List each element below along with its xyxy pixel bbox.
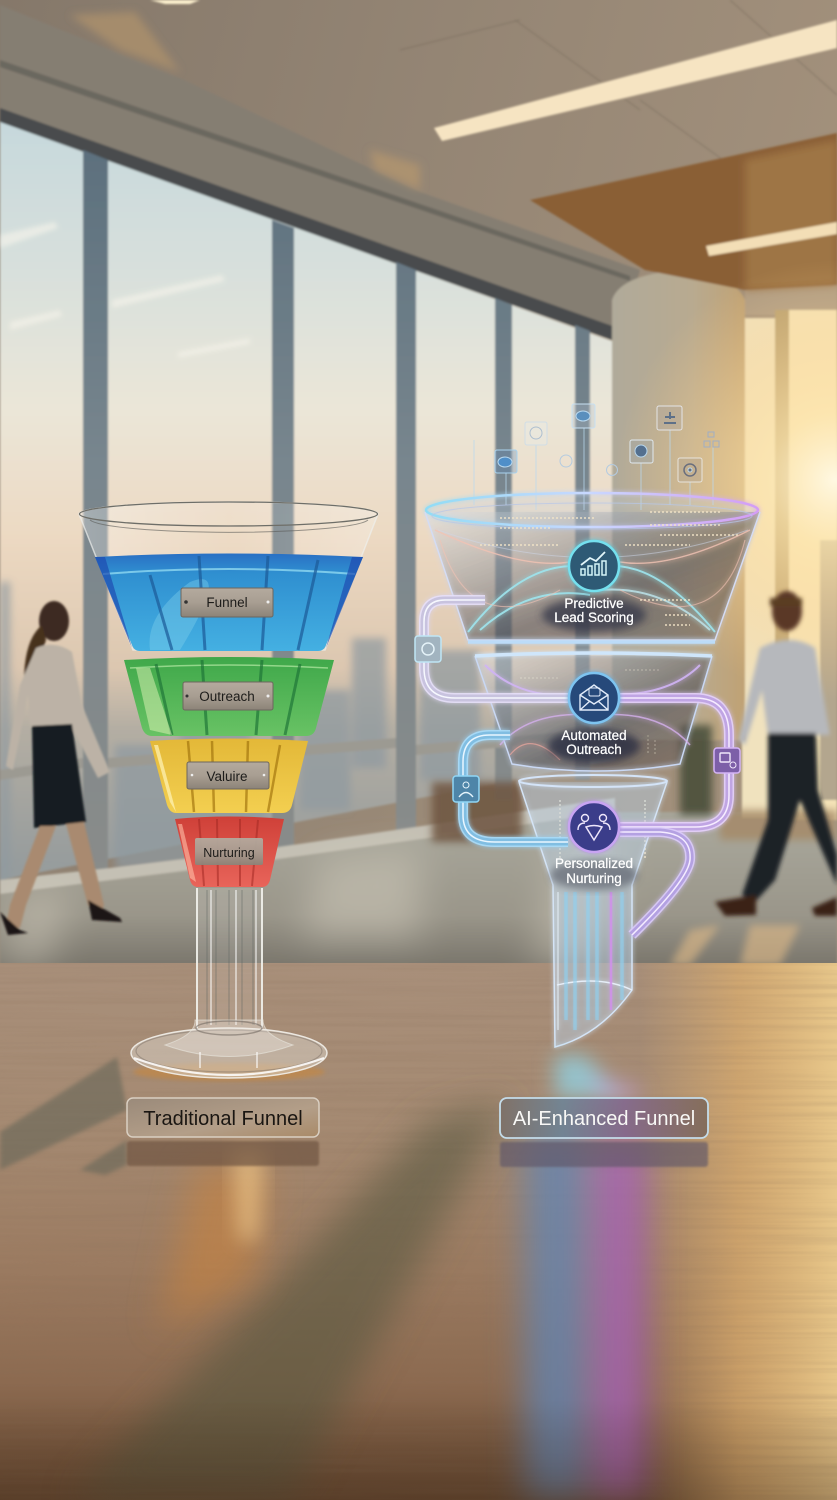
ceiling light strips xyxy=(434,20,837,141)
label plate: Nurturing: Nurturing xyxy=(203,846,255,860)
traditional glass funnel xyxy=(79,502,378,1081)
upper side wall band xyxy=(0,5,640,340)
pipe node: right xyxy=(714,748,740,773)
person: woman walking xyxy=(0,601,122,935)
window mullions xyxy=(83,150,590,880)
caption: Traditional Funnel: Traditional Funnel xyxy=(143,1108,303,1130)
glass stem xyxy=(196,888,263,1030)
pipe: spout return xyxy=(620,832,690,935)
warm wall patches xyxy=(70,12,420,190)
icon: faint refresh xyxy=(560,455,618,476)
label plate: Outreach: Outreach xyxy=(199,689,255,704)
sun glow xyxy=(615,260,837,700)
cloud streaks xyxy=(0,222,250,358)
diagonal shadow band xyxy=(70,1100,510,1500)
distant city skyline xyxy=(0,582,480,882)
window sill xyxy=(0,798,615,894)
label plate: Funnel: Funnel xyxy=(206,595,248,610)
rainbow reflection xyxy=(525,1130,645,1500)
node: Automated Outreach: Outreach xyxy=(566,742,622,757)
icon: org chart xyxy=(704,432,719,447)
node: Personalized Nurturing: Nurturing xyxy=(566,871,622,886)
data scribbles xyxy=(480,512,740,860)
table top xyxy=(0,963,837,1500)
windows xyxy=(0,122,615,882)
funnel tier 2 xyxy=(475,653,712,771)
label plate: Outreach xyxy=(183,682,273,710)
node: Personalized Nurturing: Personalized xyxy=(555,856,633,871)
right windows xyxy=(742,318,775,818)
node: Automated Outreach: Automated xyxy=(561,728,627,743)
right wall above windows xyxy=(745,285,837,315)
funnel tier 3 and spout xyxy=(519,775,667,1047)
node: Predictive Lead Scoring xyxy=(542,541,646,632)
person: man walking xyxy=(715,591,837,916)
data streams and top icons xyxy=(474,404,719,510)
label plate: Valuire xyxy=(187,762,269,789)
lounge furniture xyxy=(432,725,837,842)
icon box: circle check xyxy=(525,422,547,445)
icon box: cloud xyxy=(572,404,595,428)
caption: AI-Enhanced Funnel: AI-Enhanced Funnel xyxy=(513,1108,695,1130)
AI holographic funnel xyxy=(415,404,760,1100)
hologram table glow xyxy=(555,1055,640,1100)
bottom dark band xyxy=(0,1400,837,1500)
pipe node: left top xyxy=(415,636,441,662)
floor xyxy=(0,812,837,965)
tier: green liquid xyxy=(124,657,334,736)
label plate: Valuire: Valuire xyxy=(206,769,248,784)
table shadows xyxy=(0,1057,127,1175)
glass bowl xyxy=(79,502,378,650)
icon box: target xyxy=(678,458,702,482)
node: Personalized Nurturing xyxy=(550,802,638,890)
pipe node: left lower xyxy=(453,776,479,802)
icon box: cloud left xyxy=(495,450,517,473)
icon box: network xyxy=(630,440,653,463)
funnel tier 1 xyxy=(425,493,760,642)
caption: Traditional Funnel xyxy=(127,1098,319,1166)
curtain track line xyxy=(0,60,630,281)
glass base xyxy=(131,1020,327,1081)
warm light reflection under traditional caption xyxy=(160,1165,268,1330)
tier: red liquid xyxy=(175,816,284,887)
dark window head frame xyxy=(0,108,618,342)
node: Predictive Lead Scoring: Lead Scoring xyxy=(554,610,634,625)
node: Automated Outreach xyxy=(548,673,640,763)
icon box: team xyxy=(657,406,682,430)
pipe: lower left loop xyxy=(463,735,568,842)
pipe: top left loop xyxy=(424,600,570,698)
pipe: right upper loop xyxy=(620,698,729,827)
column xyxy=(612,270,745,740)
ceiling wood beam xyxy=(530,133,837,290)
connector pipes xyxy=(424,600,729,935)
label plate: Funnel xyxy=(181,588,273,617)
ceiling tile seams xyxy=(400,0,837,165)
tier: blue liquid xyxy=(95,554,363,651)
caption: AI-Enhanced Funnel xyxy=(500,1098,708,1167)
node: Predictive Lead Scoring: Predictive xyxy=(564,596,624,611)
horizontal rail xyxy=(0,728,610,780)
tier: yellow liquid xyxy=(150,738,308,813)
background: office interior xyxy=(0,0,837,965)
